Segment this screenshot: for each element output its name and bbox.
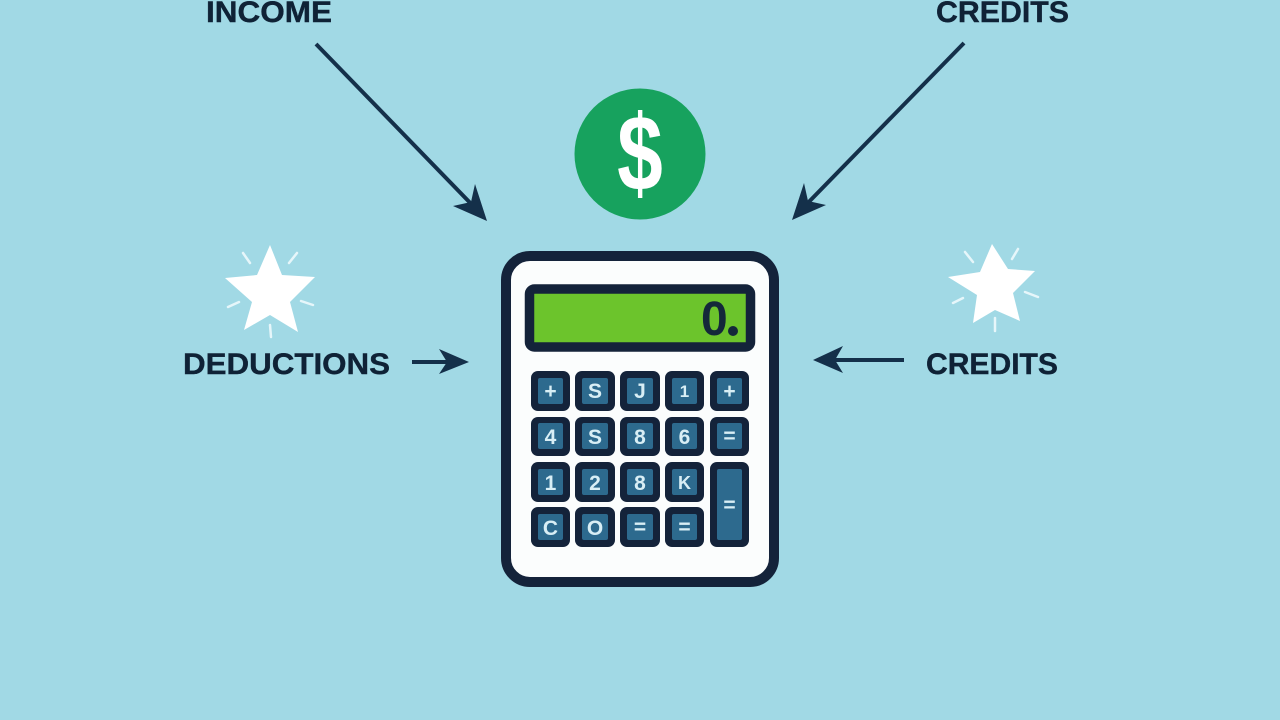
row 3 keys: 8 xyxy=(634,472,646,495)
row 4 keys xyxy=(531,507,704,547)
row 3 keys: 2 xyxy=(589,472,601,495)
row 4 keys: O xyxy=(587,517,603,540)
calculator xyxy=(506,256,774,582)
row 4 keys: C xyxy=(543,517,558,540)
row 2 keys: = xyxy=(723,425,736,448)
arrow: credits to calculator from right xyxy=(813,346,904,373)
row 1 keys: J xyxy=(634,380,646,403)
keypad xyxy=(531,371,749,547)
row 1 keys: + xyxy=(723,380,736,403)
icon: dollar coin xyxy=(574,88,706,220)
tall equals key xyxy=(710,462,749,547)
icon: credits star xyxy=(948,244,1038,331)
row 1 keys: 1 xyxy=(680,382,689,401)
arrow: income to calculator xyxy=(316,44,487,221)
row 2 keys: S xyxy=(588,426,602,449)
row 2 keys: 6 xyxy=(679,426,690,449)
calculator display xyxy=(530,289,750,347)
arrow: deductions to calculator xyxy=(412,349,469,374)
label: deductions: DEDUCTIONS xyxy=(183,348,390,381)
row 4 keys: = xyxy=(634,516,646,539)
arrow: credits to calculator xyxy=(792,43,964,220)
row 3 keys: K xyxy=(678,473,691,493)
row 4 keys: = xyxy=(678,516,691,539)
row 2 keys: 4 xyxy=(545,426,557,449)
calculator body xyxy=(506,256,774,582)
tall equals key: = xyxy=(723,494,736,517)
icon: dollar coin: $ xyxy=(617,93,663,214)
row 2 keys: 8 xyxy=(634,426,646,449)
row 2 keys xyxy=(531,417,749,456)
row 3 keys xyxy=(531,462,704,502)
calculator display: 0 xyxy=(701,293,728,346)
row 3 keys: 1 xyxy=(545,472,557,495)
row 1 keys: + xyxy=(544,380,557,403)
icon: deductions star xyxy=(225,245,315,337)
row 1 keys: S xyxy=(588,380,602,403)
row 1 keys xyxy=(531,371,749,411)
label: credits right: CREDITS xyxy=(926,348,1058,381)
